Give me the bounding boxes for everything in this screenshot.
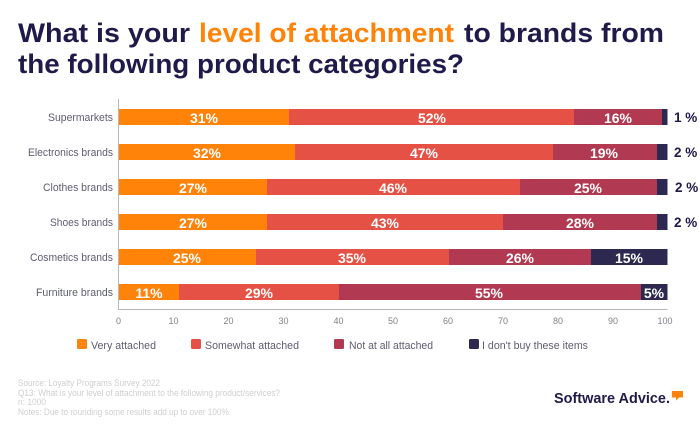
title: level of attachment bbox=[199, 18, 454, 48]
row: Cosmetics brands bbox=[30, 249, 668, 266]
x axis labels bbox=[116, 316, 673, 326]
row: Clothes brands bbox=[43, 179, 698, 196]
row: Supermarkets: 1 % bbox=[674, 110, 697, 125]
row: Clothes brands: 2 % bbox=[675, 180, 698, 195]
row: Clothes brands: Clothes brands bbox=[43, 182, 113, 194]
x axis labels: 70 bbox=[498, 316, 508, 326]
row: Shoes brands: Shoes brands bbox=[50, 217, 113, 229]
row: Supermarkets: 16% bbox=[604, 110, 633, 126]
icon: speech bubble bbox=[672, 391, 683, 400]
row: Shoes brands: 43% bbox=[371, 215, 400, 231]
legend: Not at all attached: Not at all attached bbox=[349, 340, 433, 352]
legend: Somewhat attached: Somewhat attached bbox=[205, 340, 299, 352]
logo: Software Advice: Software Advice. bbox=[554, 390, 670, 407]
row: Furniture brands: 29% bbox=[245, 285, 274, 301]
row: Clothes brands: 27% bbox=[179, 180, 208, 196]
chart axes bbox=[118, 99, 668, 310]
row: Furniture brands: 55% bbox=[475, 285, 504, 301]
row: Shoes brands: 28% bbox=[566, 215, 595, 231]
x axis labels: 50 bbox=[388, 316, 398, 326]
row: Cosmetics brands: 26% bbox=[506, 250, 535, 266]
row: Cosmetics brands: Cosmetics brands bbox=[30, 252, 113, 264]
x axis labels: 40 bbox=[333, 316, 344, 326]
row: Clothes brands: 46% bbox=[379, 180, 408, 196]
row: Supermarkets: 52% bbox=[418, 110, 447, 126]
row: Electronics brands: 47% bbox=[410, 145, 439, 161]
source notes: Notes: Due to rounding some results add up to over 100%. bbox=[18, 407, 231, 417]
row: Supermarkets: Supermarkets bbox=[48, 112, 113, 124]
legend: I don't buy these items: I don't buy these items bbox=[482, 340, 588, 352]
row: Shoes brands bbox=[50, 214, 697, 231]
row: Electronics brands: 2 % bbox=[674, 145, 697, 160]
row: Electronics brands: 19% bbox=[590, 145, 619, 161]
row: Furniture brands bbox=[36, 284, 668, 301]
row: Electronics brands: Electronics brands bbox=[28, 147, 113, 159]
x axis labels: 90 bbox=[608, 316, 618, 326]
row: Shoes brands: 2 % bbox=[674, 215, 697, 230]
row: Supermarkets bbox=[48, 109, 697, 126]
x axis labels: 20 bbox=[223, 316, 234, 326]
x axis labels: 60 bbox=[443, 316, 453, 326]
legend bbox=[77, 339, 588, 352]
row: Shoes brands: 27% bbox=[179, 215, 208, 231]
stacked bar chart bbox=[28, 99, 698, 326]
row: Furniture brands: Furniture brands bbox=[36, 287, 113, 299]
row: Furniture brands: 11% bbox=[135, 285, 163, 301]
source notes: Source: Loyalty Programs Survey 2022 bbox=[18, 378, 160, 388]
source notes: n: 1000 bbox=[18, 397, 46, 407]
row: Electronics brands: 32% bbox=[193, 145, 222, 161]
x axis labels: 30 bbox=[278, 316, 289, 326]
x axis labels: 10 bbox=[168, 316, 179, 326]
x axis labels: 0 bbox=[116, 316, 121, 326]
row: Cosmetics brands: 35% bbox=[338, 250, 367, 266]
row: Cosmetics brands: 15% bbox=[615, 250, 644, 266]
x axis labels: 80 bbox=[553, 316, 563, 326]
title: What is your bbox=[18, 18, 191, 48]
row: Supermarkets: 31% bbox=[190, 110, 219, 126]
row: Cosmetics brands: 25% bbox=[173, 250, 202, 266]
title bbox=[18, 18, 664, 79]
row: Electronics brands bbox=[28, 144, 697, 161]
x axis labels: 100 bbox=[657, 316, 673, 326]
title: the following product categories? bbox=[18, 49, 464, 79]
row: Furniture brands: 5% bbox=[644, 285, 665, 301]
source notes: Q13: What is your level of attachment to the following product/services? bbox=[18, 388, 280, 398]
title: to brands from bbox=[464, 18, 664, 48]
row: Clothes brands: 25% bbox=[574, 180, 603, 196]
source notes bbox=[18, 378, 280, 417]
legend: Very attached: Very attached bbox=[91, 340, 156, 352]
